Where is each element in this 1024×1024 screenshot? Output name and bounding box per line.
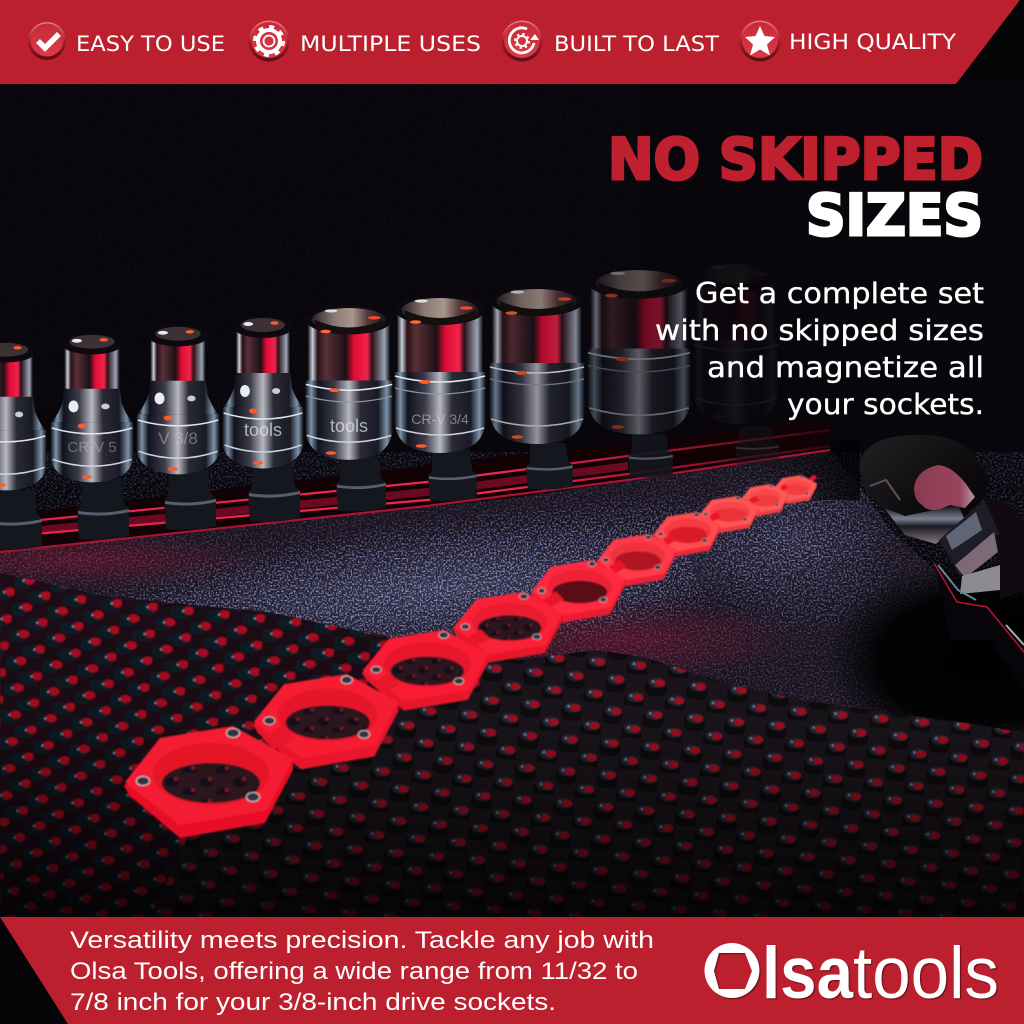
socket 3 [136,325,220,474]
icon: star [740,20,780,62]
hex holder 7 [653,512,721,557]
label: multiple uses: MULTIPLE USES [300,32,481,57]
footer text: Versatility meets precision. Tackle any job with [70,927,654,954]
footer text: 7/8 inch for your 3/8-inch drive sockets. [70,989,556,1016]
socket 7 [489,286,585,444]
hex holder 4 [453,591,564,663]
sockets row [0,261,779,490]
socket 6: CR-V 3/4 [411,411,469,427]
socket 5 [305,305,393,460]
description text: Get a complete set [695,277,984,310]
socket 4: tools [244,420,282,440]
socket 8 [587,267,691,434]
wrench head [859,435,990,545]
socket 6 [394,295,486,453]
heading: SIZES [806,183,983,249]
label: easy to use: EASY TO USE [76,32,225,57]
wrench socket pin [914,465,975,510]
hex holder 6 [597,534,677,587]
top banner [0,0,1020,84]
socket 2: CR-V 5 [67,439,117,456]
hex holder 1 [124,725,295,838]
rail clips [0,426,779,550]
logo: Olsa tools: tools [853,933,999,1014]
description text: with no skipped sizes [655,314,984,347]
heading [608,127,983,249]
socket 9 [693,261,779,424]
hex holder 8 [699,496,760,533]
hex holder 10 [773,475,817,504]
icon: check [28,22,66,60]
logo: Olsa tools: lsa [762,933,854,1014]
bottom banner [0,917,1024,1024]
hex holder 2 [253,673,400,769]
wrench jaw [984,498,1024,600]
socket 5: tools [330,416,368,436]
description text [655,277,984,421]
footer text: Olsa Tools, offering a wide range from 11/32 to [70,958,638,985]
footer text [70,927,654,1016]
heading: NO SKIPPED [608,127,983,193]
hex holder 3 [362,629,490,711]
description text: your sockets. [787,388,984,421]
socket 1 [0,341,47,490]
fabric surface [0,440,1024,760]
description text: and magnetize all [707,351,984,384]
wrench inner chrome [884,505,964,544]
wrench chrome block [939,500,1000,576]
socket 4 [222,316,304,468]
label: built to last: BUILT TO LAST [554,32,720,57]
textured mat [0,560,1024,920]
socket 2 [50,333,134,482]
hex holder 9 [740,484,789,516]
hex holder 5 [531,559,627,623]
dark fabric backdrop [0,84,1024,484]
wrench [859,435,1024,690]
icon: cycle gear [502,20,542,62]
icon: gear [248,20,290,62]
logo: Olsa tools [704,933,999,1014]
label: high quality: HIGH QUALITY [789,30,957,55]
socket 3: V 3/8 [158,429,198,448]
socket rail [0,420,830,553]
hex socket holders chain [124,475,817,838]
